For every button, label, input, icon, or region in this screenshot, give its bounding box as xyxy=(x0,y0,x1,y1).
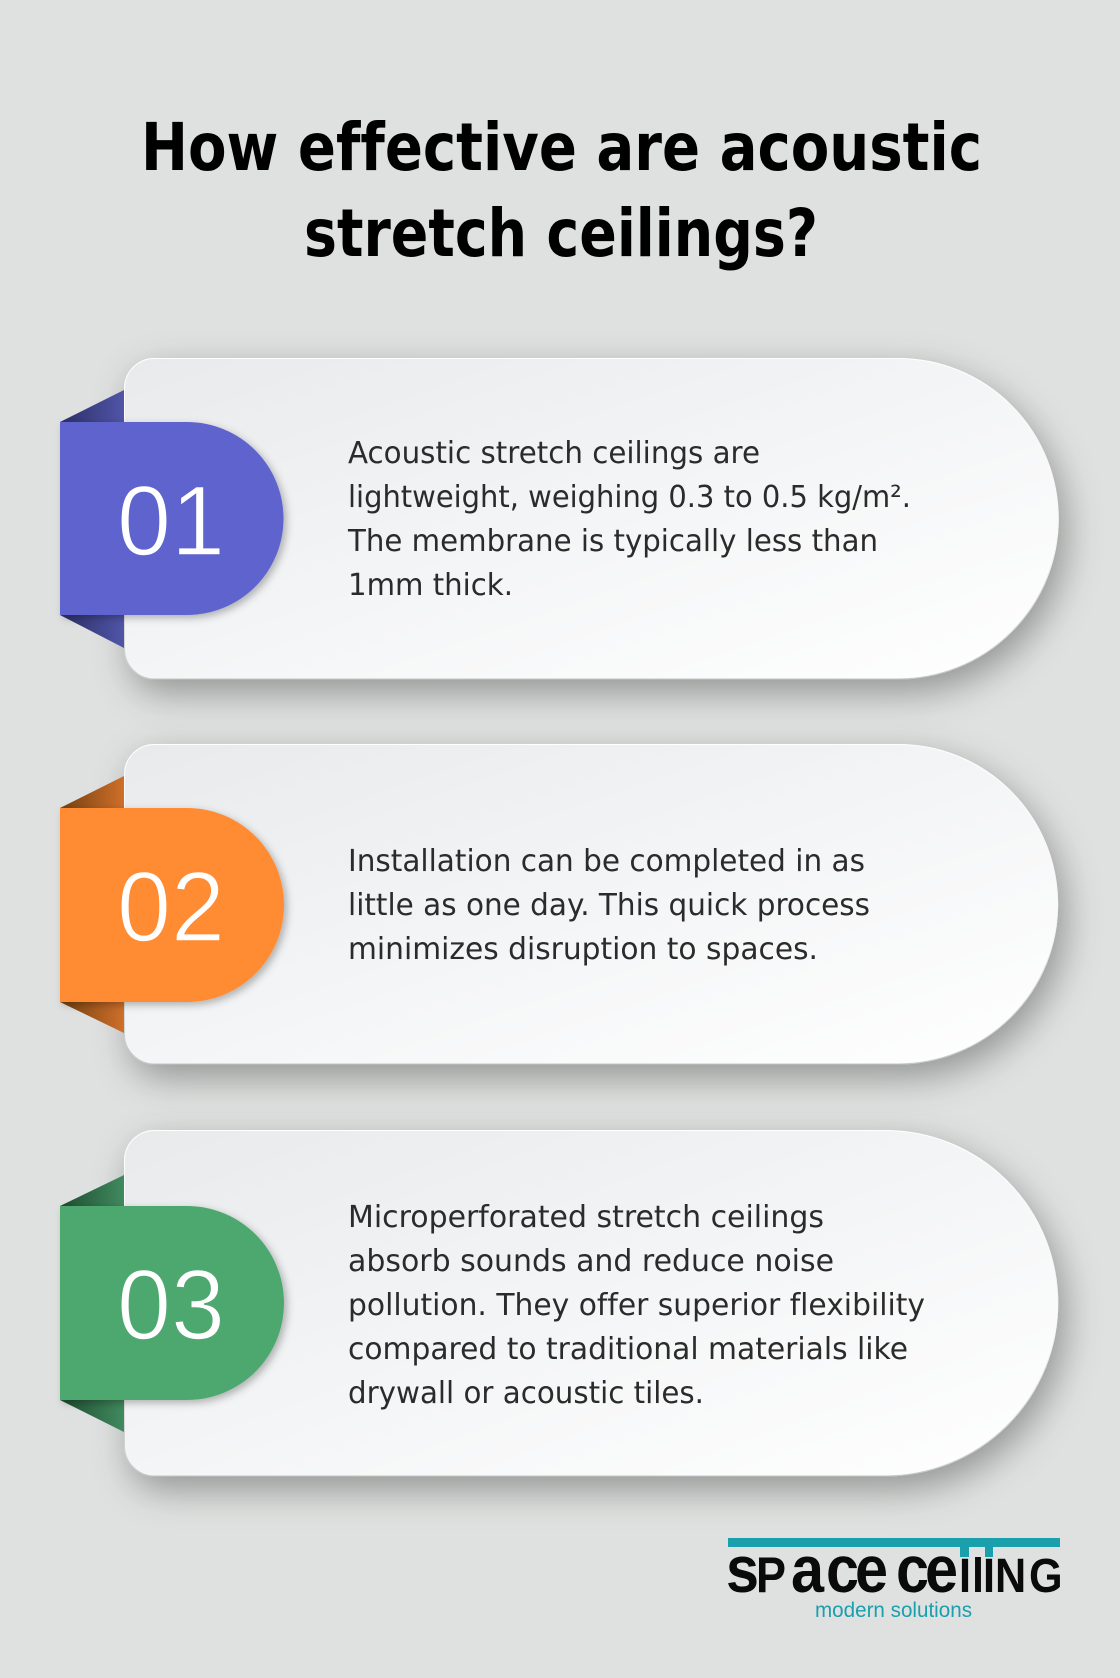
logo wordmark: l xyxy=(972,1549,984,1603)
step 2 text: little as one day. This quick process xyxy=(348,888,870,923)
step 1 text xyxy=(347,436,911,603)
logo tagline: modern solutions xyxy=(815,1599,972,1622)
panel: step 2 xyxy=(60,744,1058,1064)
step 1 text: The membrane is typically less than xyxy=(347,524,878,559)
logo wordmark: I xyxy=(959,1549,971,1603)
logo wordmark: s xyxy=(726,1533,759,1607)
step 2 text xyxy=(348,844,870,967)
step 1 text: 1mm thick. xyxy=(348,568,513,603)
step 3 text: compared to traditional materials like xyxy=(348,1332,908,1367)
title: How effective are acoustic xyxy=(141,109,982,186)
number badge xyxy=(60,808,284,1002)
step 1 text: Acoustic stretch ceilings are xyxy=(348,436,760,471)
logo wordmark: ING xyxy=(983,1549,1063,1603)
card background xyxy=(124,744,1058,1064)
number badge xyxy=(60,422,284,615)
title: stretch ceilings? xyxy=(304,195,818,272)
step 2 text: Installation can be completed in as xyxy=(348,844,865,879)
step 3 text: absorb sounds and reduce noise xyxy=(348,1244,834,1279)
number badge xyxy=(60,1206,284,1400)
panel: step 1 xyxy=(60,358,1058,679)
step 1 text: lightweight, weighing 0.3 to 0.5 kg/m². xyxy=(348,480,911,515)
number 03: 03 xyxy=(117,1249,225,1360)
panel: step 3 xyxy=(60,1130,1058,1476)
logo wordmark: P xyxy=(756,1548,786,1604)
logo wordmark: ace ce xyxy=(791,1533,958,1607)
step 3 text: pollution. They offer superior flexibility xyxy=(348,1288,925,1323)
number 01: 01 xyxy=(117,465,225,576)
logo: Space Ceiling xyxy=(726,1533,1063,1622)
number ribbon folds xyxy=(60,390,124,648)
card background xyxy=(124,358,1058,679)
logo ceiling bar xyxy=(728,1538,1060,1557)
card background xyxy=(124,1130,1058,1476)
number 02: 02 xyxy=(117,851,225,962)
number ribbon folds xyxy=(60,1175,124,1432)
step 3 text xyxy=(348,1200,925,1411)
step 3 text: Microperforated stretch ceilings xyxy=(348,1200,824,1235)
step 2 text: minimizes disruption to spaces. xyxy=(348,932,818,967)
title xyxy=(141,109,982,272)
number ribbon folds xyxy=(60,776,124,1033)
step 3 text: drywall or acoustic tiles. xyxy=(348,1376,704,1411)
